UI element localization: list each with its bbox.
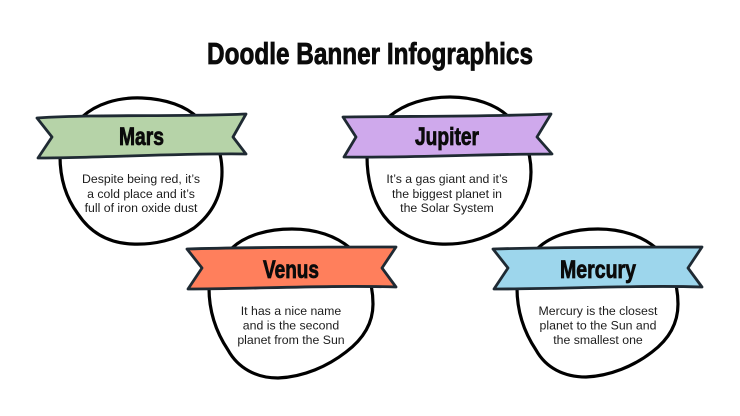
Jupiter description: It’s a gas giant and it’s [386, 172, 508, 186]
title: Doodle Banner Infographics [207, 36, 533, 71]
Venus banner [187, 247, 396, 289]
Mercury description: Mercury is the closest [539, 304, 658, 318]
Venus description: and is the second [243, 318, 339, 332]
Jupiter description: the biggest planet in [392, 187, 502, 201]
Mars description: a cold place and it’s [87, 187, 195, 201]
Mercury description: the smallest one [553, 333, 643, 347]
Jupiter doodle circle [367, 97, 531, 244]
Mercury description: planet to the Sun and [540, 318, 657, 332]
Jupiter description [386, 172, 508, 215]
panel: Jupiter [343, 97, 552, 244]
Mars doodle circle [60, 98, 222, 244]
Venus description: planet from the Sun [237, 333, 345, 347]
panel: Venus [187, 229, 396, 378]
Mercury banner [493, 247, 702, 289]
Venus description [237, 304, 345, 347]
Mercury doodle circle [517, 229, 678, 377]
Venus heading: Venus [263, 256, 319, 284]
panel: Mars [37, 98, 246, 244]
Jupiter banner [343, 114, 552, 157]
Mars heading: Mars [119, 123, 164, 151]
panel: Mercury [493, 229, 702, 377]
Mars description [82, 172, 200, 215]
Mars banner [37, 114, 246, 158]
Venus doodle circle [209, 229, 373, 378]
Jupiter heading: Jupiter [415, 123, 479, 151]
Mercury heading: Mercury [560, 256, 636, 284]
Jupiter description: the Solar System [400, 201, 494, 215]
Venus description: It has a nice name [241, 304, 341, 318]
Mars description: full of iron oxide dust [85, 201, 198, 215]
Mars description: Despite being red, it’s [82, 172, 200, 186]
Mercury description [539, 304, 658, 347]
